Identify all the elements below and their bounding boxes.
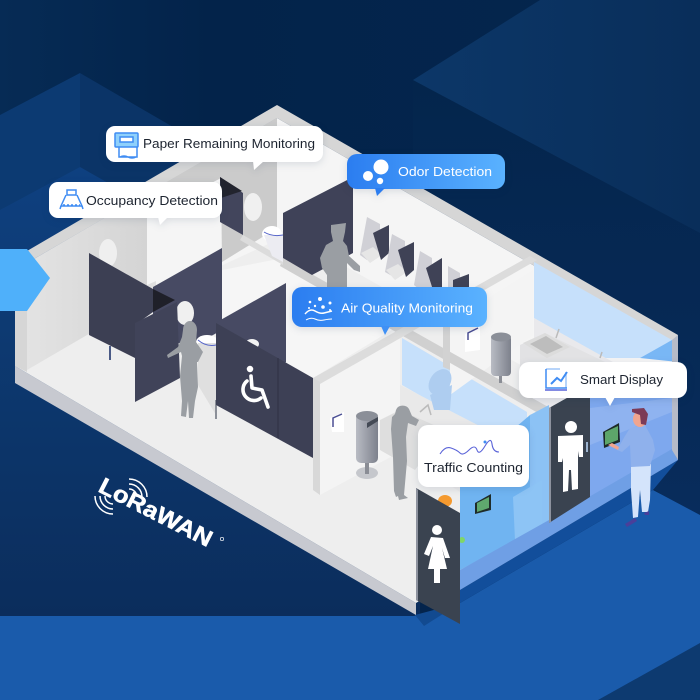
building floor plate <box>15 217 678 615</box>
accessible stall <box>216 283 313 458</box>
small display tablet <box>475 494 491 514</box>
callout: smart display <box>519 362 687 406</box>
trash can: left room <box>356 411 378 479</box>
sink counter: right room <box>520 329 605 395</box>
hand dryer: right room <box>465 326 480 352</box>
stalls: left row <box>89 239 222 415</box>
icon: traffic line <box>440 440 499 454</box>
orange and green accents <box>438 495 465 543</box>
men's room door <box>549 385 590 523</box>
callout: odor detection: Odor Detection <box>398 164 492 179</box>
callout: paper remaining monitoring: Paper Remaining Monitoring <box>143 136 315 151</box>
callout: odor detection <box>347 154 505 196</box>
callout: traffic counting <box>418 425 529 487</box>
partition walls <box>280 256 678 495</box>
callout: paper remaining monitoring <box>106 126 323 170</box>
icon: odor bubbles <box>363 160 388 184</box>
smart display tablet <box>603 423 620 448</box>
icon: air particles <box>305 297 332 320</box>
sink counter: left room <box>380 405 445 470</box>
trash can: right room <box>491 332 511 383</box>
icon: man <box>558 421 583 492</box>
LoRaWAN logo: LoRaWAN <box>95 472 217 552</box>
callout: air quality monitoring: Air Quality Monitoring <box>341 300 473 316</box>
callout: air quality monitoring <box>292 287 487 335</box>
icon: occupancy sensor <box>60 190 83 209</box>
back left wall <box>15 105 277 372</box>
silhouette: man at urinal <box>320 223 360 290</box>
logo: signal arcs <box>95 479 147 514</box>
callout: occupancy detection: Occupancy Detection <box>86 193 218 208</box>
mirror reflection figure <box>424 365 456 410</box>
icon: rising chart <box>545 369 567 390</box>
stalls: top row <box>220 177 353 275</box>
callout: smart display: Smart Display <box>580 372 663 387</box>
hand dryer: left room <box>330 412 344 432</box>
women's room door <box>416 488 460 624</box>
icon: wheelchair <box>243 366 268 407</box>
man using display <box>608 408 655 527</box>
side hexagon marker <box>0 249 50 311</box>
icon: paper dispenser <box>115 133 138 158</box>
silhouette: woman at sink <box>391 406 419 500</box>
glass front wall <box>460 335 678 590</box>
callout: traffic counting: Traffic Counting <box>424 460 523 475</box>
urinals <box>360 217 469 290</box>
icon: woman <box>424 525 450 583</box>
callout: occupancy detection <box>49 182 222 225</box>
silhouette: woman at stall <box>167 321 203 418</box>
back right wall <box>277 105 678 450</box>
